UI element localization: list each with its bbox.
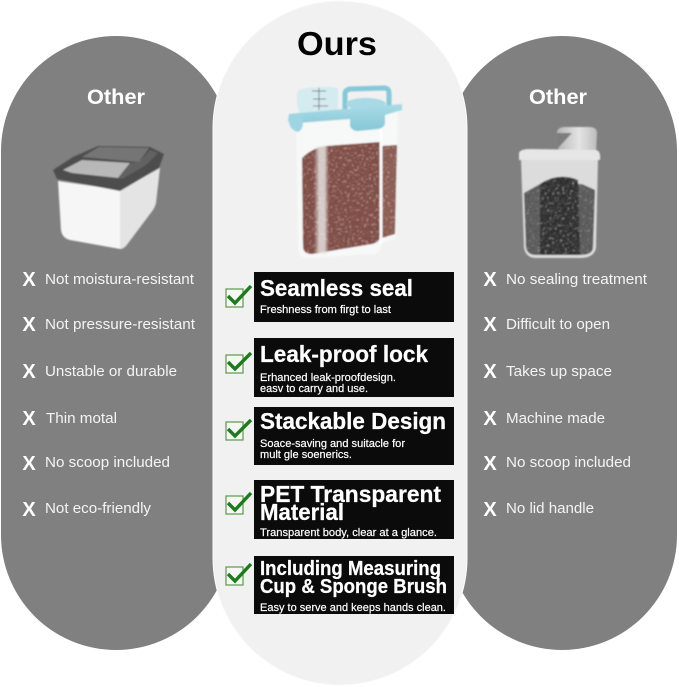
item: thin metal <box>22 408 117 430</box>
item: machine made <box>483 408 605 430</box>
item: no sealing <box>483 269 648 291</box>
heading: ours: Ours <box>297 25 377 62</box>
item: no lid handle: No lid handle <box>506 500 594 517</box>
item: difficult to open: Difficult to open <box>506 316 610 333</box>
label box <box>254 556 454 614</box>
label box: Soace-saving and suitacle for <box>260 438 405 450</box>
icon: check <box>226 493 251 514</box>
label box: Cup & Sponge Brush <box>260 576 447 598</box>
item: takes up space <box>483 361 612 383</box>
item: not eco friendly <box>22 499 151 521</box>
heading: left other: Other <box>87 85 146 109</box>
item: no sealing: No sealing treatment <box>506 271 648 288</box>
item: unstable <box>22 361 177 383</box>
icon: left product bin <box>53 146 164 249</box>
item: no scoop: X <box>22 453 36 475</box>
item: unstable: Unstable or durable <box>45 363 177 380</box>
feature: stackable design <box>226 407 454 465</box>
list: right negatives <box>483 269 648 521</box>
item: unstable: X <box>22 361 36 383</box>
item: not pressure resistant: Not pressure-resistant <box>45 316 196 333</box>
icon: check <box>226 353 251 373</box>
item: no lid handle: X <box>483 499 497 521</box>
label box: Leak-proof lock <box>260 341 428 367</box>
label box: easv to carry and use. <box>260 383 368 395</box>
item: no lid handle <box>483 499 594 521</box>
panel: left other <box>1 36 231 650</box>
feature: measuring cup and sponge brush <box>226 556 454 614</box>
item: thin metal: X <box>22 408 36 430</box>
label box <box>254 272 454 322</box>
label box <box>254 338 454 397</box>
label box: PET Transparent <box>260 481 441 507</box>
icon: check <box>226 420 251 440</box>
label box: mult gle soenerics. <box>260 449 352 461</box>
item: no scoop: No scoop included <box>45 454 170 471</box>
item: takes up space: Takes up space <box>506 363 612 380</box>
item: not pressure resistant: X <box>22 314 36 336</box>
heading: right other: Other <box>529 85 588 109</box>
item: takes up space: X <box>483 361 497 383</box>
item: not pressure resistant <box>22 314 196 336</box>
label box: Including Measuring <box>260 558 441 580</box>
item: machine made: Machine made <box>506 410 605 427</box>
item: not moisture resistant: X <box>22 269 36 291</box>
feature: seamless seal <box>226 272 454 322</box>
label box: Erhanced leak-proofdesign. <box>260 372 396 384</box>
item: machine made: X <box>483 408 497 430</box>
label box: Material <box>260 499 344 525</box>
label box: Easy to serve and keeps hands clean. <box>260 602 446 614</box>
item: no scoop <box>483 453 631 475</box>
list: left negatives <box>22 269 196 521</box>
icon: check <box>226 564 251 585</box>
item: no sealing: X <box>483 269 497 291</box>
item: not moisture resistant <box>22 269 195 291</box>
label box: Seamless seal <box>260 275 413 301</box>
label box: Freshness from firgt to last <box>260 304 392 316</box>
item: thin metal: Thin motal <box>46 410 117 427</box>
label box: Stackable Design <box>260 408 446 434</box>
icon: check <box>226 286 251 307</box>
item: no scoop: X <box>483 453 497 475</box>
item: no scoop <box>22 453 170 475</box>
item: no scoop: No scoop included <box>506 454 631 471</box>
item: not eco friendly: X <box>22 499 36 521</box>
icon: center product container <box>288 87 402 258</box>
label box <box>254 480 454 539</box>
panel: ours center <box>213 1 467 685</box>
item: not eco friendly: Not eco-friendly <box>45 500 151 517</box>
item: not moisture resistant: Not moistura-resistant <box>45 271 195 288</box>
icon: right product dispenser <box>519 127 600 258</box>
feature: PET transparent material <box>226 480 454 539</box>
label box: Transparent body, clear at a glance. <box>260 527 437 539</box>
panel: right other <box>447 36 677 650</box>
feature: leak-proof lock <box>226 338 454 397</box>
item: difficult to open <box>483 314 610 336</box>
item: difficult to open: X <box>483 314 497 336</box>
label box <box>254 407 454 465</box>
